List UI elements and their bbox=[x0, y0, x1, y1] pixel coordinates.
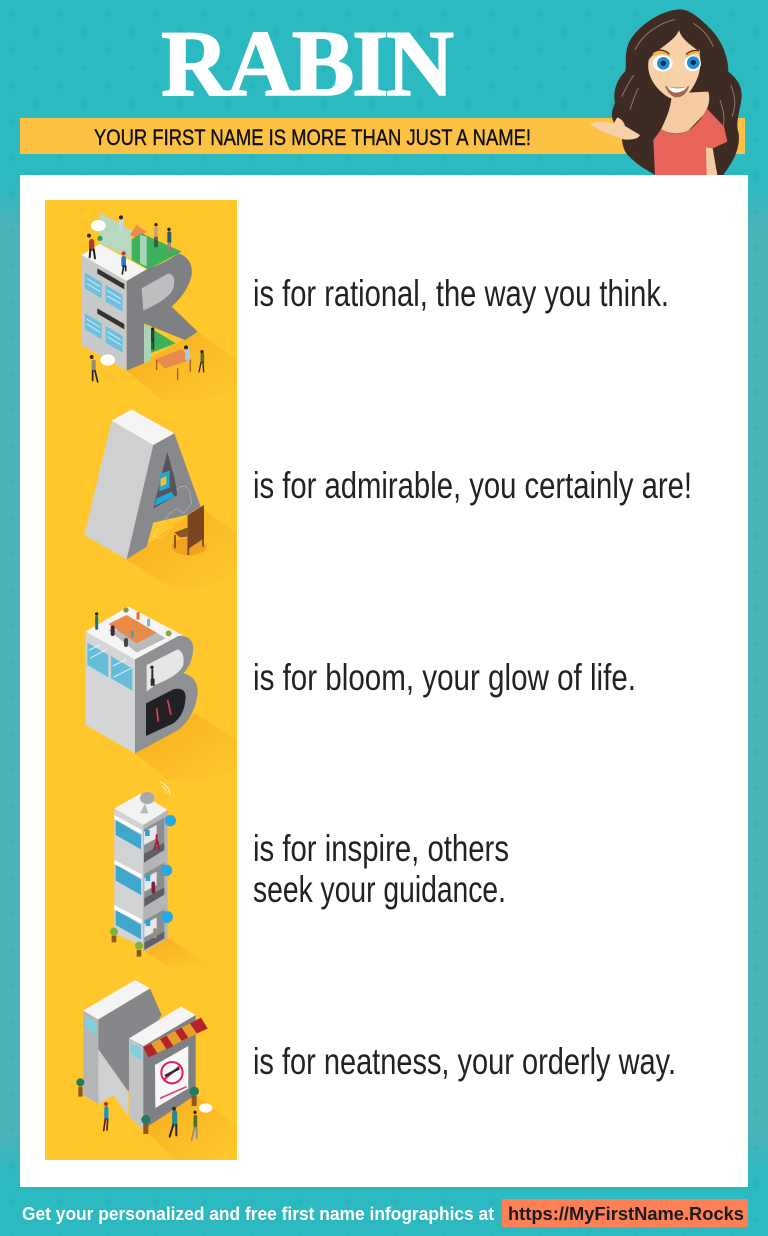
awning bbox=[143, 1018, 208, 1057]
text: I line: is for inspire, others bbox=[253, 828, 509, 869]
yellow illustration column bbox=[45, 200, 237, 1160]
title: RABIN bbox=[161, 12, 454, 116]
text: I line bbox=[253, 828, 509, 910]
no smoking sign bbox=[155, 1046, 188, 1108]
footer url badge bbox=[502, 1199, 748, 1227]
outlined seated figure bbox=[153, 486, 192, 538]
left face bbox=[82, 255, 127, 371]
illustration: letter R building bbox=[82, 213, 237, 400]
footer url badge: https://MyFirstName.Rocks bbox=[508, 1204, 744, 1224]
shirt bbox=[653, 108, 727, 175]
illustration: woman character bbox=[590, 9, 742, 175]
people bbox=[87, 215, 204, 382]
chair bbox=[188, 505, 204, 549]
illustration: letter N bbox=[76, 980, 237, 1160]
text: I line: seek your guidance. bbox=[253, 869, 506, 910]
illustration: letter A bbox=[84, 409, 237, 587]
illustration: letter B bbox=[86, 607, 237, 780]
text: R line: is for rational, the way you think. bbox=[253, 273, 669, 314]
main white panel bbox=[20, 175, 748, 1187]
face bbox=[648, 30, 700, 99]
subtitle band bbox=[20, 118, 745, 154]
neck and chest bbox=[661, 92, 709, 133]
text: B line: is for bloom, your glow of life. bbox=[253, 657, 636, 698]
subtitle band: YOUR FIRST NAME IS MORE THAN JUST A NAME! bbox=[94, 125, 531, 150]
hand bbox=[590, 117, 640, 140]
illustration: letter I bbox=[110, 782, 212, 967]
footer prompt: Get your personalized and free first name infographics at bbox=[22, 1204, 494, 1224]
